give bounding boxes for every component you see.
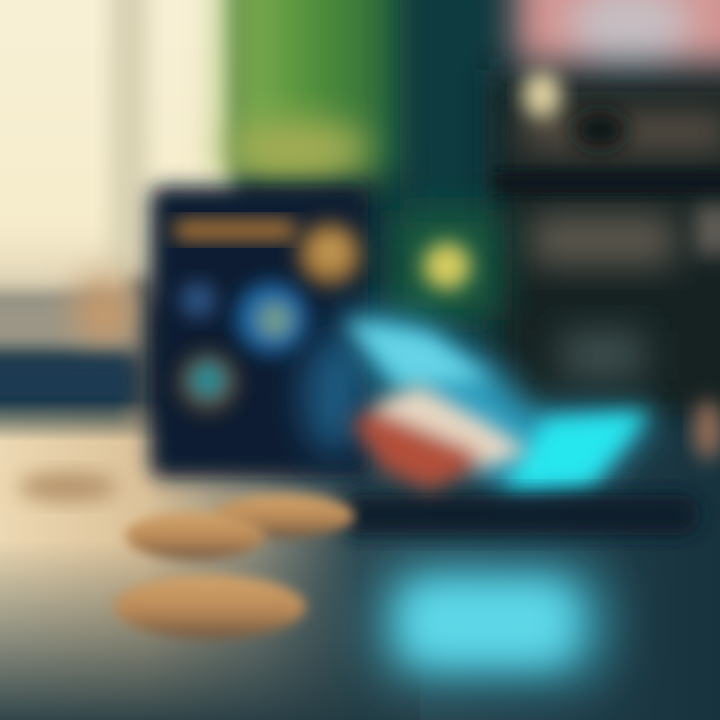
green card with yellow dot	[392, 210, 500, 320]
glowing cyan device	[340, 310, 720, 535]
table	[0, 400, 720, 720]
cookie: middle	[125, 512, 265, 560]
left sofa band	[0, 276, 140, 406]
red and white card	[352, 385, 530, 490]
tablet	[150, 186, 368, 478]
blue glow on tablet edge	[303, 335, 367, 455]
teal and orange chart	[178, 352, 238, 412]
small blue circle	[180, 282, 216, 318]
orange heading blur	[174, 220, 296, 240]
large blue circle	[236, 282, 308, 354]
cookie: far left	[18, 472, 118, 502]
cookies	[18, 472, 355, 639]
shelf right	[495, 71, 720, 380]
pink backdrop top right	[515, 0, 720, 65]
cookie: back	[215, 494, 355, 538]
cookie: front	[114, 575, 306, 639]
cyan reflection on table	[385, 570, 600, 675]
orange circle icon	[298, 222, 362, 286]
